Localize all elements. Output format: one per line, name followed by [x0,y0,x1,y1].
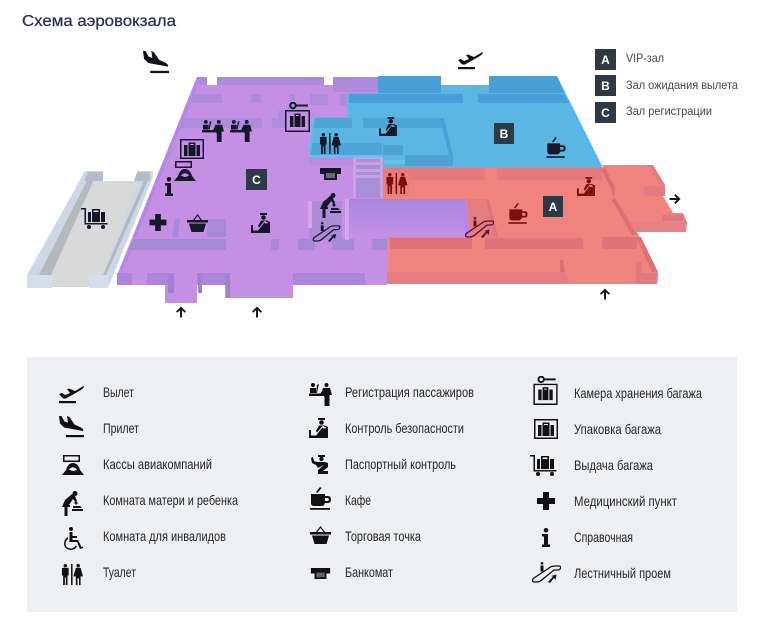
item: luggage wrapping [534,419,661,439]
legend item B: Зал ожидания вылета [626,78,738,92]
zone legend [595,49,738,123]
zone C marker: C [252,173,261,187]
item: toilets [62,564,136,585]
icon: check-in 2 [230,120,252,142]
arrow: entrance 3 [600,288,610,300]
icon: cafe in VIP hall [508,203,528,224]
icon: information [165,177,173,196]
arrow: entrance 2 [252,306,262,318]
icon: toilets in lounge [320,133,341,154]
item: ticket desks: Кассы авиакомпаний [103,456,212,472]
item: passport control [311,455,456,474]
panel: zone C registration hall [117,77,470,303]
legend item B: B [601,79,610,93]
item: passport control: Паспортный контроль [345,456,456,472]
item: departures: Вылет [103,384,134,400]
item: stairway [532,562,671,583]
panel: zone A VIP hall [383,165,687,284]
legend item A: VIP-зал [626,51,664,65]
item: accessible room [64,527,226,550]
item: toilets: Туалет [103,564,136,580]
item: shop [310,526,421,544]
panel: icon legend [27,357,737,612]
item: information: Справочная [574,529,633,545]
arrow: VIP exit [670,194,680,204]
item: security [309,418,464,438]
title: Схема аэровокзала [22,13,176,30]
zone A marker [543,196,563,217]
item: cafe: Кафе [345,492,371,508]
icon: toilets in VIP hall [386,173,407,194]
item: arrivals [59,416,139,437]
item: check-in: Регистрация пассажиров [345,384,474,400]
icon: arrivals plane [143,51,169,73]
item: medical point: Медицинский пункт [574,493,677,509]
item: left luggage [533,377,702,405]
item: mother and child room: Комната матери и ребенка [103,492,238,508]
item: mother and child room [62,491,238,516]
item: ticket desks [62,455,212,475]
legend item C: C [601,106,610,120]
item: check-in [309,383,474,406]
icon: baggage trolley [81,208,108,229]
icon: stairway in VIP hall [465,217,494,238]
icon: ATM [320,168,341,180]
item: medical point [537,492,677,510]
panel: zone B departure lounge [309,76,603,168]
icon: check-in 1 [202,120,224,142]
icon: stairway [313,222,340,242]
item: baggage claim [530,455,653,476]
legend item C [595,102,712,123]
zone C marker [246,169,267,190]
stair block [353,156,383,198]
item: ATM: Банкомат [345,564,393,580]
legend item C: Зал регистрации [626,104,712,118]
icon: luggage wrapping [180,139,204,159]
icon: departures plane [458,52,483,69]
zone A marker: A [549,200,558,214]
panel: baggage claim annex [27,171,153,288]
icon: security check [251,213,270,233]
item: shop: Торговая точка [345,528,421,544]
item: stairway: Лестничный проем [574,565,671,581]
legend item A [595,49,664,70]
item: left luggage: Камера хранения багажа [574,385,702,401]
item: ATM [311,564,393,580]
zone B marker: B [500,127,509,141]
item: baggage claim: Выдача багажа [574,457,653,473]
legend item A: A [601,53,610,67]
icon: medical point [150,214,166,231]
icon: airline ticket desk [174,161,196,181]
item: departures [59,384,134,403]
icon: mother and child room [320,193,341,218]
zone B marker [494,123,514,144]
legend item B [595,75,738,96]
item: cafe [310,487,371,510]
item: arrivals: Прилет [103,420,139,436]
item: luggage wrapping: Упаковка багажа [574,421,661,437]
icon: shop basket [187,214,208,232]
icon: security in VIP hall [577,177,595,196]
arrow: entrance 1 [176,306,186,318]
item: information [542,528,633,547]
icon: arrivals hall left-luggage [285,103,310,132]
item: accessible room: Комната для инвалидов [103,528,226,544]
icon: cafe in lounge [546,137,566,158]
icon: security in lounge [379,117,397,136]
item: security: Контроль безопасности [345,420,464,436]
